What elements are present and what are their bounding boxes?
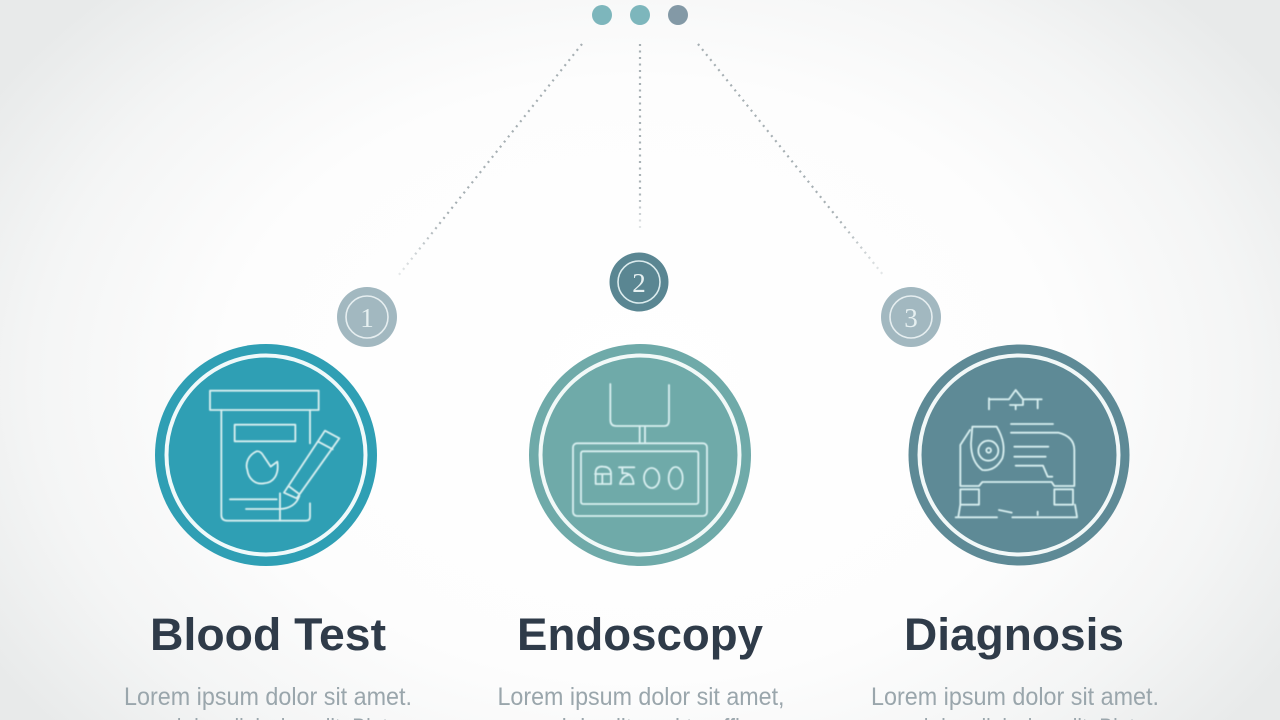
- heading: Blood Test: Blood Test: [150, 609, 386, 660]
- text block: diagnosis description: Lorem ipsum dolor sit amet.: [871, 683, 1159, 711]
- icon: endoscopy monitor: [573, 384, 707, 516]
- icon: diagnostic machine: [956, 390, 1077, 517]
- text block: blood test description: Lorem ipsum dolor sit amet.: [124, 683, 412, 711]
- step badge 1: [337, 287, 397, 347]
- heading: Diagnosis: Diagnosis: [904, 609, 1124, 660]
- dotted connector: center: [639, 44, 641, 230]
- step badge 2: [610, 252, 668, 312]
- step badge 2: 2: [632, 268, 646, 298]
- dotted connector: right: [698, 44, 884, 276]
- top indicator dots: [592, 5, 688, 25]
- heading: Endoscopy: Endoscopy: [517, 609, 763, 660]
- panel: blood test circle icon: [155, 344, 377, 566]
- step badge 1: 1: [360, 303, 374, 333]
- dotted connector: left: [398, 44, 582, 276]
- text block: endoscopy description: Lorem ipsum dolor sit amet,: [498, 683, 784, 711]
- icon: specimen jar and pencil: [210, 391, 339, 521]
- step badge 3: [881, 287, 941, 347]
- panel: diagnosis circle icon: [908, 344, 1130, 566]
- step badge 3: 3: [904, 303, 918, 333]
- panel: endoscopy circle icon: [529, 344, 751, 566]
